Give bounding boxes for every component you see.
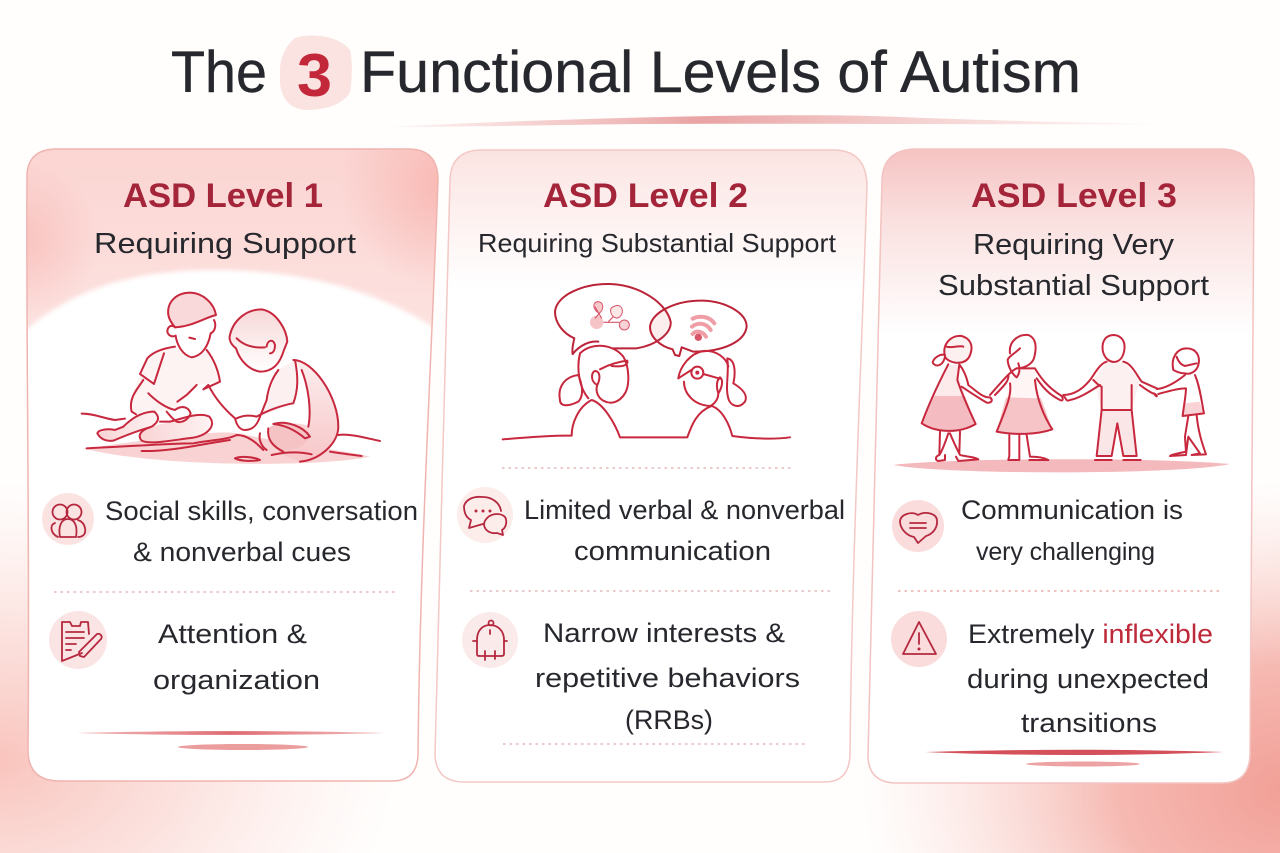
heading: ASD Level 2 bbox=[543, 177, 748, 215]
point: communication: Communication is bbox=[961, 495, 1183, 525]
divider bbox=[54, 591, 398, 593]
icon: warning triangle bbox=[891, 611, 947, 667]
icon: heart speech bubble bbox=[892, 500, 944, 552]
illustration: two children playing bbox=[82, 293, 380, 464]
divider bbox=[503, 743, 805, 745]
point: repetitive behaviors: Narrow interests & bbox=[543, 618, 785, 648]
point: attention: Attention & bbox=[158, 619, 307, 649]
point: communication: Limited verbal & nonverbal bbox=[524, 495, 845, 525]
point: inflexibility: during unexpected bbox=[967, 664, 1209, 694]
bubble symbols: signal waves bbox=[692, 317, 714, 339]
subheading: Requiring Substantial Support bbox=[478, 228, 837, 258]
point: social skills bbox=[42, 493, 418, 567]
illustration: children holding hands bbox=[893, 335, 1230, 472]
panel: ASD Level 3 bbox=[865, 149, 1257, 783]
point: attention bbox=[49, 611, 320, 695]
number highlight blob bbox=[280, 36, 352, 110]
card background bbox=[435, 150, 867, 782]
point: communication: communication bbox=[574, 536, 771, 566]
card top tint bbox=[449, 150, 866, 252]
point: inflexibility: Extremely inflexible bbox=[968, 619, 1213, 649]
point: inflexibility bbox=[891, 611, 1213, 738]
point: repetitive behaviors: (RRBs) bbox=[625, 705, 713, 735]
bottom accent bbox=[76, 731, 385, 750]
icon: notepad and pencil bbox=[49, 611, 107, 669]
point: communication bbox=[892, 495, 1183, 566]
card outline bbox=[27, 149, 438, 781]
card header tint bbox=[20, 145, 445, 790]
icon: chat bubbles bbox=[457, 487, 513, 543]
card background bbox=[868, 149, 1254, 783]
title: Functional Levels of Autism bbox=[360, 40, 1081, 105]
subheading: Requiring Very bbox=[973, 229, 1175, 261]
point: communication bbox=[457, 487, 845, 566]
subheading bbox=[938, 229, 1209, 302]
divider bbox=[898, 590, 1222, 592]
bottom accent bbox=[925, 750, 1224, 766]
point: attention: organization bbox=[153, 665, 320, 695]
point: repetitive behaviors bbox=[462, 612, 800, 735]
title underline bbox=[388, 115, 1172, 127]
point: communication: very challenging bbox=[976, 538, 1155, 566]
card top tint bbox=[880, 150, 1254, 304]
icon: bell-shaped figure bbox=[462, 612, 518, 668]
title: 3 bbox=[297, 42, 332, 109]
heading: ASD Level 3 bbox=[971, 177, 1177, 215]
point: social skills: Social skills, conversation bbox=[105, 496, 418, 526]
subheading: Substantial Support bbox=[938, 270, 1209, 302]
title: The bbox=[171, 40, 267, 105]
card white body bbox=[20, 270, 440, 790]
bubble symbols: linked hearts bbox=[590, 302, 629, 330]
title bbox=[171, 36, 1081, 110]
subheading: Requiring Support bbox=[94, 228, 356, 260]
point: social skills: & nonverbal cues bbox=[133, 537, 351, 567]
panel: ASD Level 2 bbox=[435, 150, 870, 782]
card outline bbox=[868, 149, 1254, 783]
point: inflexibility: transitions bbox=[1021, 708, 1157, 738]
heading: ASD Level 1 bbox=[123, 177, 323, 215]
divider bbox=[470, 590, 830, 592]
illustration: two people with speech bubbles bbox=[503, 284, 790, 439]
divider bbox=[502, 467, 794, 469]
panel: ASD Level 1 bbox=[20, 145, 445, 790]
card background bbox=[27, 149, 438, 781]
icon: people bbox=[42, 493, 94, 545]
card outline bbox=[435, 150, 867, 782]
point: repetitive behaviors: repetitive behaviors bbox=[535, 663, 800, 693]
